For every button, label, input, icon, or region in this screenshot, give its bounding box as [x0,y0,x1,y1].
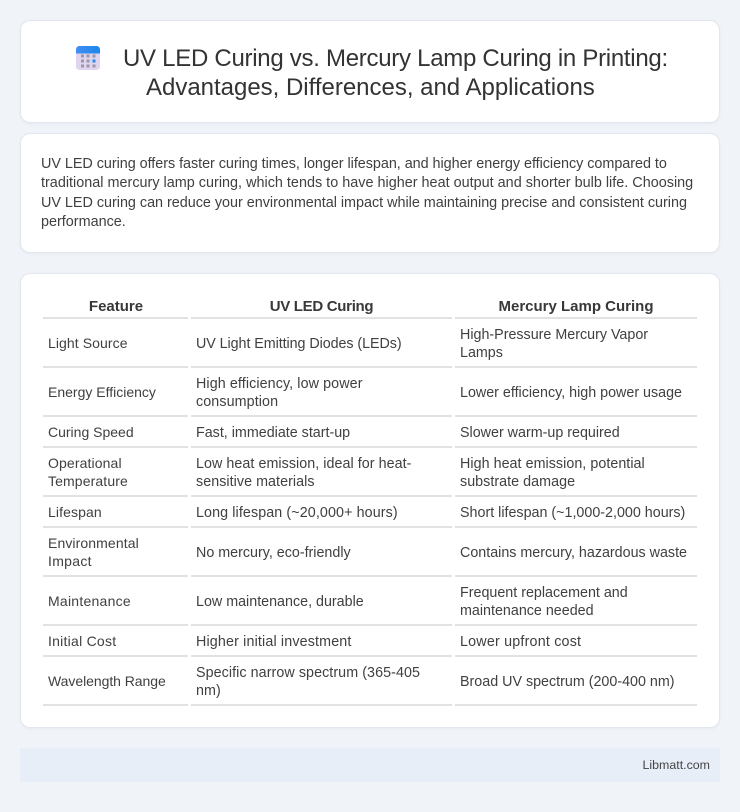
comparison table: Long lifespan (~20,000+ hours) [196,505,398,521]
title: Advantages, Differences, and Applications [146,74,595,101]
panel: title card [20,20,720,123]
comparison table: Impact [48,553,92,569]
panel: comparison table [20,273,720,728]
row: curing speed [43,424,697,448]
comparison table: maintenance needed [460,603,594,619]
title [123,45,668,101]
comparison table: High heat emission, potential [460,456,645,472]
comparison table: Light Source [48,335,128,351]
comparison table: Operational [48,455,122,471]
comparison table: Lower upfront cost [460,634,581,650]
row: maintenance [43,585,697,626]
comparison table: Fast, immediate start-up [196,425,350,441]
comparison table: nm) [196,683,221,699]
intro text: UV LED curing offers faster curing times, longer lifespan, and higher energy efficiency compared to [41,156,667,172]
comparison table: High-Pressure Mercury Vapor [460,327,648,343]
comparison table: High efficiency, low power [196,376,363,392]
table header [43,298,697,319]
row: environmental impact [43,535,697,577]
comparison table: Contains mercury, hazardous waste [460,545,687,561]
comparison table: Low heat emission, ideal for heat- [196,456,411,472]
row: light source [43,327,697,368]
comparison table: sensitive materials [196,474,315,490]
row: energy efficiency [43,376,697,417]
comparison table: Wavelength Range [48,673,166,689]
comparison table: Mercury Lamp Curing [498,298,654,315]
comparison table: Curing Speed [48,424,134,440]
comparison table [43,298,697,706]
row: wavelength range [43,665,697,706]
comparison table: Short lifespan (~1,000-2,000 hours) [460,505,685,521]
comparison table: substrate damage [460,474,575,490]
comparison table: Broad UV spectrum (200-400 nm) [460,674,675,690]
icon: calendar grid [76,46,100,70]
comparison table: Temperature [48,473,128,489]
intro text: performance. [41,214,126,230]
comparison table: Maintenance [48,593,131,609]
row: operational temperature [43,455,697,497]
comparison table: Lamps [460,345,503,361]
comparison table: Frequent replacement and [460,585,628,601]
footer text: Libmatt.com [643,758,710,772]
intro text: UV LED curing can reduce your environmental impact while maintaining precise and consistent curing [41,195,687,211]
comparison table: UV Light Emitting Diodes (LEDs) [196,336,402,352]
comparison table: Low maintenance, durable [196,594,364,610]
comparison table: No mercury, eco-friendly [196,545,351,561]
comparison table: Environmental [48,535,139,551]
comparison table: Initial Cost [48,633,116,649]
title: UV LED Curing vs. Mercury Lamp Curing in Printing: [123,45,668,72]
panel: introduction [20,133,720,253]
comparison table: Lower efficiency, high power usage [460,385,682,401]
row: lifespan [43,504,697,528]
footer bar [20,748,720,782]
intro text: traditional mercury lamp curing, which tends to have higher heat output and shorter bulb life. Choosing [41,175,693,191]
comparison table: Higher initial investment [196,634,352,650]
comparison table: Energy Efficiency [48,384,156,400]
comparison table: consumption [196,394,278,410]
comparison table: Specific narrow spectrum (365-405 [196,665,420,681]
intro text [41,156,693,230]
comparison table: Lifespan [48,504,102,520]
row: initial cost [43,633,697,657]
comparison table: UV LED Curing [270,298,373,315]
comparison table: Slower warm-up required [460,425,620,441]
comparison table: Feature [89,298,143,315]
